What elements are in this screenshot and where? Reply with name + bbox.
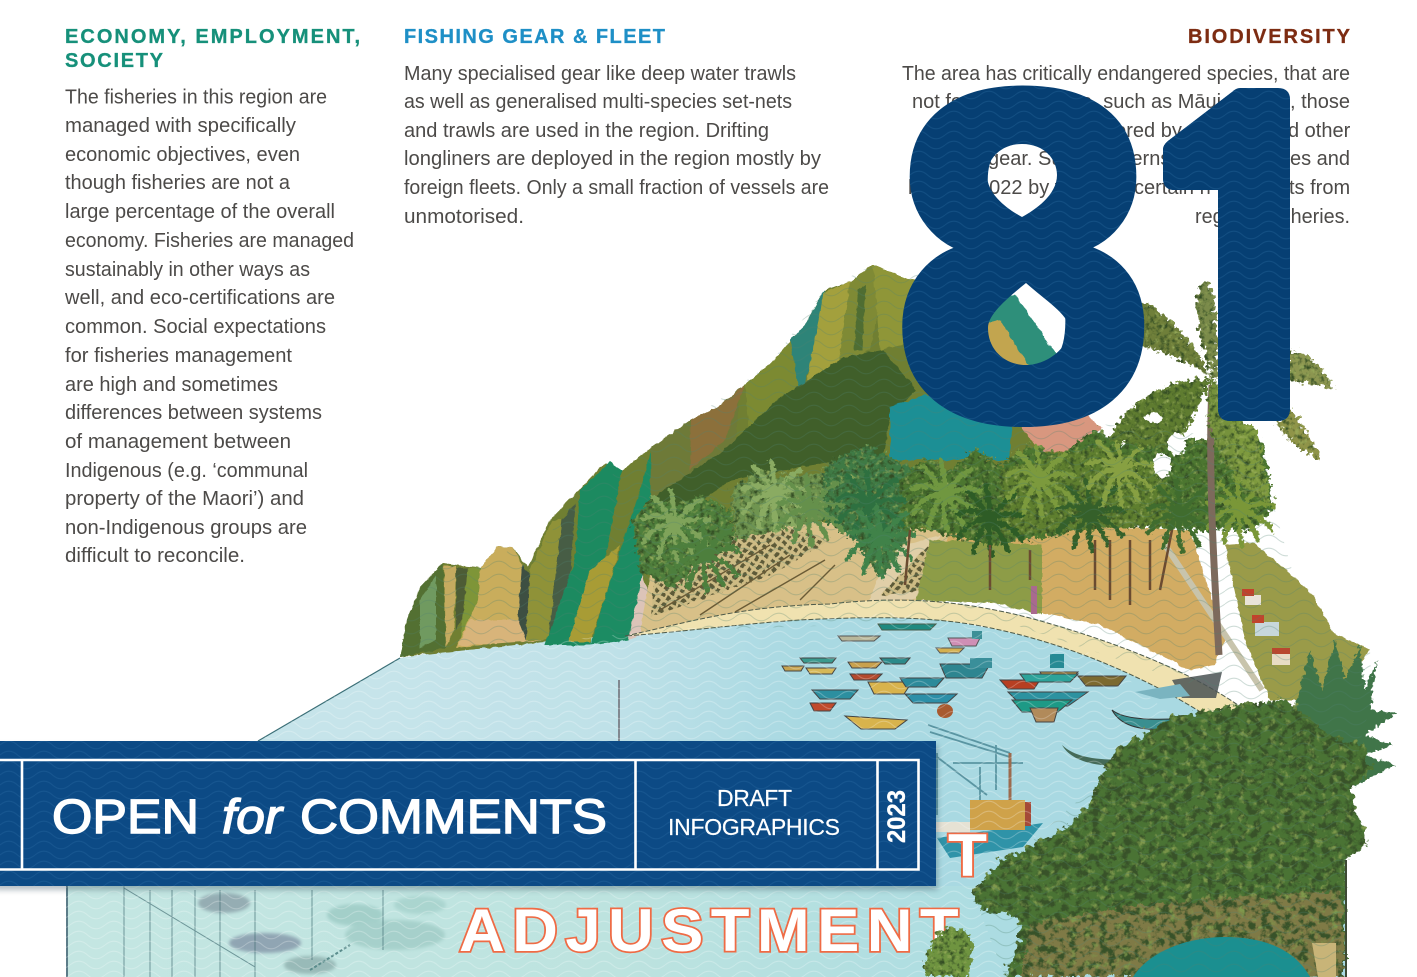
banner fill: [0, 741, 936, 886]
left coast line: [66, 886, 68, 977]
body: fishing gear: Many specialised gear like deep water trawls: [404, 63, 796, 85]
banner title: COMMENTS: [300, 791, 607, 844]
sea: lower water: [66, 886, 1066, 977]
mangrove lagoon: [1133, 937, 1310, 977]
body: economy: differences between systems: [65, 402, 322, 424]
banner title: for: [222, 791, 284, 844]
body: economy: The fisheries in this region are: [65, 86, 327, 108]
stem and flag of the 1: [1163, 88, 1290, 421]
body: economy: sustainably in other ways as: [65, 259, 310, 281]
fishing boats in the bay: [782, 624, 1222, 766]
orange outlined title word (hidden first line): T: [948, 822, 987, 889]
mountain: teal cliff: [890, 395, 1012, 460]
striped cliff: [526, 520, 562, 640]
body: economy: large percentage of the overall: [65, 201, 335, 223]
big number 81: [902, 86, 1290, 427]
body: economy: though fisheries are not a: [65, 172, 291, 194]
gaps between fronds: [1133, 364, 1186, 478]
underwater: fish school and net: [124, 886, 446, 977]
body: economy: property of the Maori’) and: [65, 488, 304, 510]
lower slopes: terraces and land: [640, 520, 1370, 700]
banner: open for comments: [0, 741, 938, 890]
mountain: main rock mass: [400, 265, 1160, 657]
body: biodiversity: The area has critically endangered species, that are: [902, 63, 1350, 85]
heading: fishing gear: FISHING GEAR & FLEET: [404, 26, 665, 48]
body: economy: difficult to reconcile.: [65, 545, 245, 567]
mangrove roots and sand: [1312, 943, 1336, 977]
body: economy: economy. Fisheries are managed: [65, 230, 354, 252]
bush over title: [925, 928, 973, 977]
banner label: draft infographics: DRAFT: [717, 785, 792, 811]
illustration: island bay scene: [0, 265, 1397, 977]
sea: upper bay: [0, 612, 1346, 977]
orange outlined title word: ADJUSTMENT: ADJUSTMENT: [459, 897, 966, 964]
upper ridges: [650, 388, 740, 530]
column: economy, employment, society: SOCIETY: [65, 50, 164, 72]
heading: economy: ECONOMY, EMPLOYMENT,: [65, 26, 360, 48]
column: fishing gear and fleet: [404, 26, 829, 228]
mountain: speckled peak seen through the 8: [985, 295, 1060, 368]
banner shadow: [0, 745, 938, 890]
body: biodiversity: certain h: [1134, 177, 1211, 199]
tall coconut palm: [1108, 280, 1334, 655]
banner frame: [0, 760, 918, 870]
body: biodiversity: bans in 2022 by the: [908, 177, 1083, 199]
banner label: draft infographics: INFOGRAPHICS: [668, 814, 840, 840]
body: fishing gear: longliners are deployed in the region mostly by: [404, 148, 821, 170]
canopy mass: [632, 430, 1274, 590]
body: economy: non-Indigenous groups are: [65, 517, 307, 539]
banner title: OPEN: [52, 791, 199, 844]
body: economy: [64, 86, 354, 567]
banner title: [52, 791, 607, 844]
body: economy: managed with specifically: [65, 115, 296, 137]
mangrove spiky palm: [1290, 640, 1397, 785]
big number 81: 8: [894, 0, 1152, 515]
body: economy: Indigenous (e.g. ‘communal: [65, 460, 308, 482]
palm trunk: [1211, 385, 1219, 655]
column: economy, employment, society: [64, 26, 360, 567]
palm fronds: [1108, 280, 1334, 505]
palm crowns in the canopy: [643, 436, 1274, 591]
low rocks and gold cliffs: [400, 563, 446, 657]
mountain: pink rock: [1015, 405, 1102, 452]
body: economy: are high and sometimes: [65, 374, 278, 396]
person on beach: [1031, 586, 1037, 614]
body: biodiversity: ses and: [1280, 148, 1350, 170]
tree trunks: [905, 530, 1172, 605]
mangrove thicket: [973, 640, 1397, 977]
body: economy: well, and eco-certifications are: [64, 287, 335, 309]
body: biodiversity: , those: [1290, 91, 1350, 113]
body: fishing gear: [404, 63, 829, 228]
body: biodiversity: that are endangered by: [975, 120, 1182, 142]
teardrop counters of the 8: [978, 138, 1066, 226]
trawler with rigging: [928, 725, 1043, 858]
illustration wave texture: [0, 612, 1173, 977]
body: biodiversity: d other: [1288, 120, 1351, 142]
body: economy: economic objectives, even: [65, 144, 300, 166]
heading: biodiversity: BIODIVERSITY: [1188, 26, 1351, 48]
mast: [618, 680, 620, 741]
mangrove canopy: [973, 700, 1372, 977]
village houses: [1242, 589, 1290, 665]
mountain: dark forest slope: [645, 350, 916, 530]
forest: tree canopy: [632, 430, 1274, 591]
banner label: draft infographics: [668, 785, 840, 840]
big number 81: 1: [1118, 0, 1376, 517]
banner year: 2023: [883, 790, 911, 843]
body: fishing gear: and trawls are used in the region. Drifting: [404, 120, 769, 142]
body: economy: for fisheries management: [65, 345, 292, 367]
body: economy: of management between: [65, 431, 291, 453]
body: economy: common. Social expectations: [65, 316, 326, 338]
body: biodiversity: [902, 63, 1351, 228]
body: biodiversity: regional fisheries.: [1195, 206, 1350, 228]
body: biodiversity: gear. Such concerns: [988, 148, 1170, 170]
beach: sand crescent: [625, 600, 1245, 728]
body: fishing gear: as well as generalised multi-species set-nets: [404, 91, 792, 113]
body: biodiversity: not found elsewhere, such as Māui: [912, 91, 1221, 113]
body: fishing gear: foreign fleets. Only a small fraction of vessels are: [404, 177, 829, 199]
column: biodiversity: [902, 26, 1351, 228]
body: biodiversity: ts from: [1289, 177, 1350, 199]
body: fishing gear: unmotorised.: [404, 206, 524, 228]
